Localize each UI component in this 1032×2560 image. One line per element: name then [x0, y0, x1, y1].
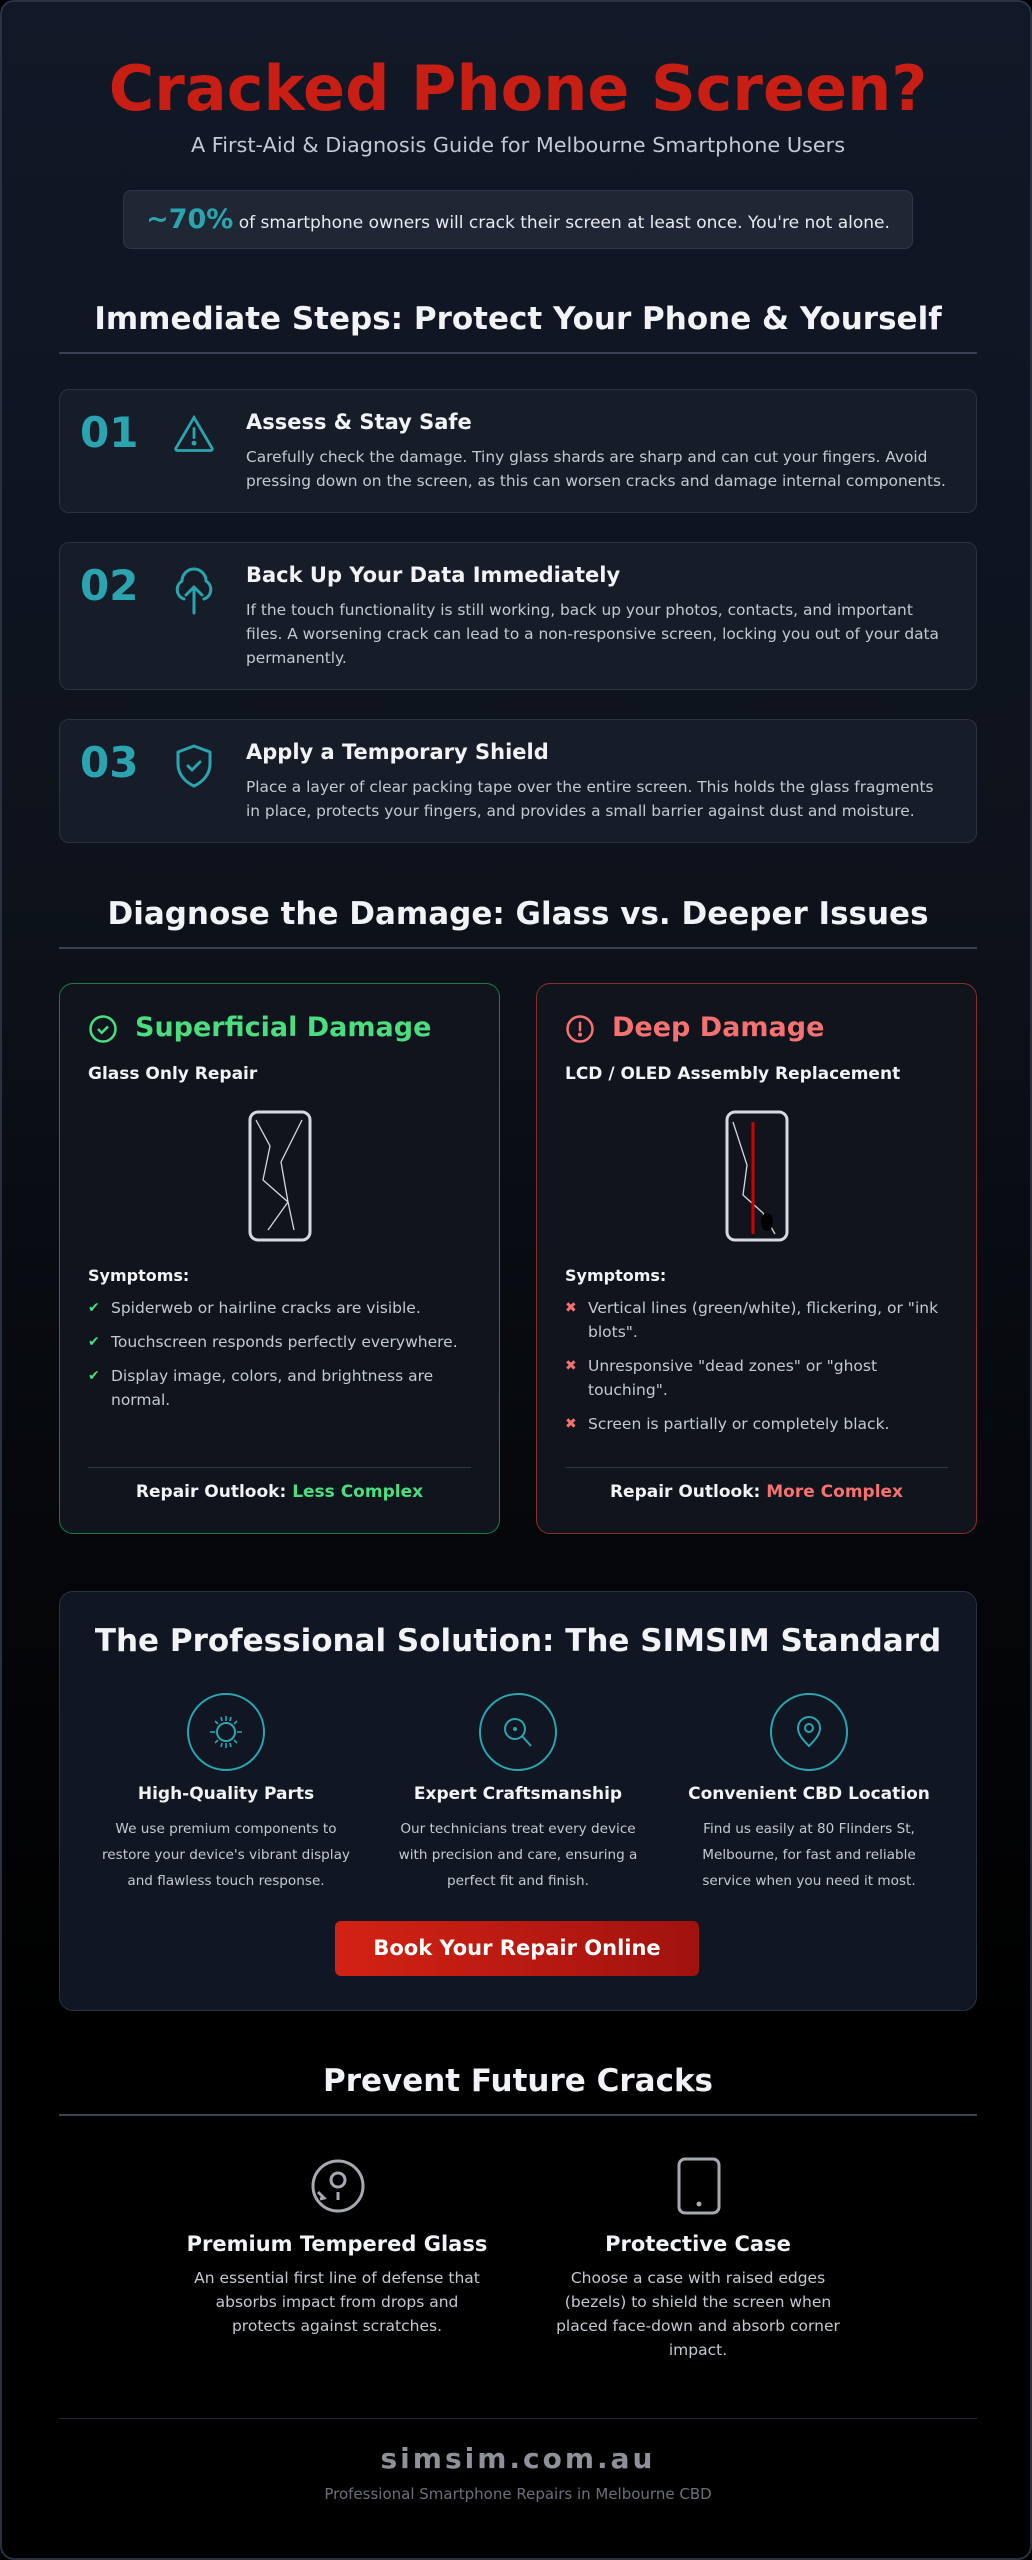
panel: deep damage: Symptoms: [565, 1266, 666, 1285]
heading: immediate steps: Immediate Steps: Protect Your Phone & Yourself [94, 301, 942, 337]
panel: deep damage: ✖ [565, 1358, 577, 1374]
step 3 card: 03 [80, 738, 138, 787]
text: Our technicians treat every device with precision and care, ensuring a perfect fit and finish. [399, 1821, 637, 1889]
icon: glass badge [312, 2160, 364, 2212]
panel: deep damage: Screen is partially or completely black. [588, 1415, 890, 1433]
stat callout [123, 190, 913, 249]
panel: deep damage: ✖ [565, 1300, 577, 1316]
tip: tempered glass [187, 2160, 487, 2335]
panel: superficial damage: Touchscreen responds perfectly everywhere. [111, 1333, 458, 1351]
panel: superficial damage: Spiderweb or hairline cracks are visible. [111, 1299, 421, 1317]
heading: diagnose: Diagnose the Damage: Glass vs. Deeper Issues [107, 896, 929, 932]
text: Convenient CBD Location [688, 1784, 930, 1804]
panel: superficial damage: Glass Only Repair [88, 1064, 257, 1084]
panel: deep damage: ✖ [565, 1416, 577, 1432]
panel: deep damage: LCD / OLED Assembly Replacement [565, 1064, 900, 1084]
panel: superficial damage: Symptoms: [88, 1266, 189, 1285]
footer tagline: Professional Smartphone Repairs in Melbourne CBD [324, 2485, 712, 2503]
icon: alert circle [566, 1015, 594, 1043]
icon: cloud upload [176, 568, 212, 614]
step 3 card: Place a layer of clear packing tape over the entire screen. This holds the glass fragments [246, 778, 934, 796]
panel: deep damage: Vertical lines (green/white), flickering, or "ink blots". [588, 1299, 938, 1341]
step 1 card: 01 [80, 408, 138, 457]
step 2 card: Back Up Your Data Immediately [246, 563, 620, 587]
step 2 card: 02 [80, 561, 138, 610]
panel: professional solution [59, 1591, 977, 2011]
text: Find us easily at 80 Flinders St, [703, 1821, 915, 1837]
text: We use premium components to restore your device's vibrant display and flawless touch response. [102, 1821, 350, 1889]
icon: shield check [176, 744, 212, 788]
heading: prevent: Prevent Future Cracks [323, 2063, 713, 2099]
text: Premium Tempered Glass [187, 2232, 487, 2256]
step 1 card: Assess & Stay Safe [246, 410, 472, 434]
tip: protective case [556, 2158, 840, 2359]
step 1 card: Carefully check the damage. Tiny glass shards are sharp and can cut your fingers. Avoid pressing down on the screen, as this can worsen cracks and damage internal components. [246, 448, 946, 490]
panel: deep damage: Repair Outlook: More Complex [610, 1482, 903, 1502]
text: Melbourne, for fast and reliable [702, 1847, 916, 1863]
button: book repair: Book Your Repair Online [373, 1936, 661, 1960]
panel: superficial damage: Repair Outlook: Less Complex [136, 1482, 423, 1502]
panel: deep damage [536, 983, 977, 1534]
panel: superficial damage [59, 983, 500, 1534]
panel: deep damage: Unresponsive "dead zones" or "ghost [588, 1357, 877, 1375]
icon: map pin [770, 1693, 848, 1771]
step 2 card: files. A worsening crack can lead to a non-responsive screen, locking you out of your data permanently. [246, 625, 939, 667]
step 3 card: Apply a Temporary Shield [246, 740, 549, 764]
feature: CBD location [688, 1693, 930, 1889]
feature: expert craftsmanship [399, 1693, 637, 1889]
icon: magnifier [479, 1693, 557, 1771]
icon: broken display phone [726, 1110, 788, 1242]
panel: superficial damage: Superficial Damage [135, 1012, 431, 1043]
text: service when you need it most. [702, 1873, 916, 1889]
text: High-Quality Parts [138, 1784, 314, 1804]
stat callout: ~70% of smartphone owners will crack their screen at least once. You're not alone. [146, 204, 890, 235]
step 3 card [59, 719, 977, 843]
text: Protective Case [605, 2232, 791, 2256]
footer brand: simsim.com.au [380, 2442, 656, 2475]
heading: professional solution: The Professional Solution: The SIMSIM Standard [95, 1623, 941, 1659]
icon: check circle [89, 1015, 117, 1043]
panel: superficial damage: ✔ [88, 1334, 100, 1350]
panel: deep damage: Deep Damage [612, 1012, 824, 1043]
step 2 card: If the touch functionality is still working, back up your photos, contacts, and important [246, 601, 913, 619]
icon: phone case [678, 2158, 720, 2214]
step 3 card: in place, protects your fingers, and provides a small barrier against dust and moisture. [246, 802, 915, 820]
icon: chip/sun [187, 1693, 265, 1771]
panel: superficial damage: ✔ [88, 1368, 100, 1384]
button: book repair [335, 1921, 699, 1976]
text: Expert Craftsmanship [414, 1784, 622, 1804]
title: Cracked Phone Screen? [109, 52, 927, 125]
panel: superficial damage: ✔ [88, 1300, 100, 1316]
step 1 card [59, 389, 977, 513]
icon: cracked phone [248, 1110, 312, 1242]
icon: warning triangle [174, 414, 214, 452]
text: Choose a case with raised edges (bezels) to shield the screen when placed face-down and absorb corner impact. [556, 2269, 840, 2359]
subtitle: A First-Aid & Diagnosis Guide for Melbourne Smartphone Users [191, 133, 845, 157]
feature: high-quality parts [102, 1693, 350, 1889]
panel: superficial damage: Display image, colors, and brightness are normal. [111, 1367, 433, 1409]
text: An essential first line of defense that absorbs impact from drops and protects against scratches. [194, 2269, 480, 2335]
panel: deep damage: touching". [588, 1381, 668, 1399]
step 2 card [59, 542, 977, 690]
